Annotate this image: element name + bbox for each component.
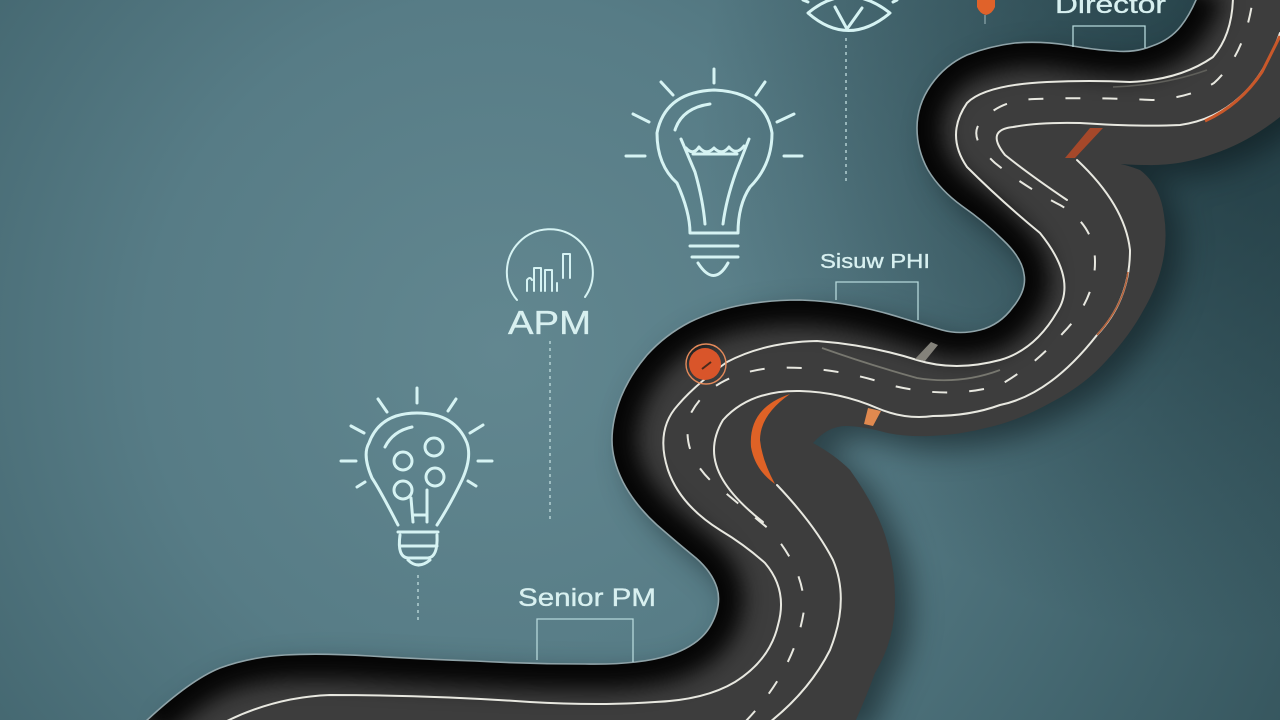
upper lane line xyxy=(997,33,1280,200)
orange road wedge xyxy=(1065,128,1103,158)
icon: orange pin xyxy=(977,0,995,24)
label box: Director xyxy=(1073,26,1145,48)
grey road patch xyxy=(915,342,938,361)
orange arc xyxy=(751,394,790,484)
icon: light bulb with circles xyxy=(341,388,492,565)
dotted connector: APM xyxy=(549,341,551,520)
icon: eye xyxy=(803,0,897,30)
orange edge line middle xyxy=(1097,272,1128,335)
outer lane line xyxy=(225,0,1233,720)
inner lane line xyxy=(714,160,1130,522)
orange road patch xyxy=(864,408,881,426)
label box: Sisuw PHI xyxy=(836,282,918,320)
orange marker xyxy=(686,344,726,384)
icon: light bulb with wavy filament xyxy=(626,69,802,276)
lower right lane line xyxy=(770,485,841,720)
centre dashed line xyxy=(688,0,1253,720)
faint grey upper line xyxy=(1113,70,1207,87)
label: APM: APM xyxy=(508,304,591,341)
label: Senior PM: Senior PM xyxy=(518,584,656,612)
dotted connector: eye xyxy=(845,38,847,183)
dotted connector: bulb xyxy=(417,575,419,620)
faint grey lines xyxy=(822,348,1000,380)
icon: APM arc with bars xyxy=(507,229,593,300)
label: Sisuw PHI: Sisuw PHI xyxy=(820,251,930,273)
background darkening top right xyxy=(700,0,1280,640)
orange edge line right xyxy=(1205,36,1280,121)
label box: Senior PM xyxy=(537,619,633,662)
